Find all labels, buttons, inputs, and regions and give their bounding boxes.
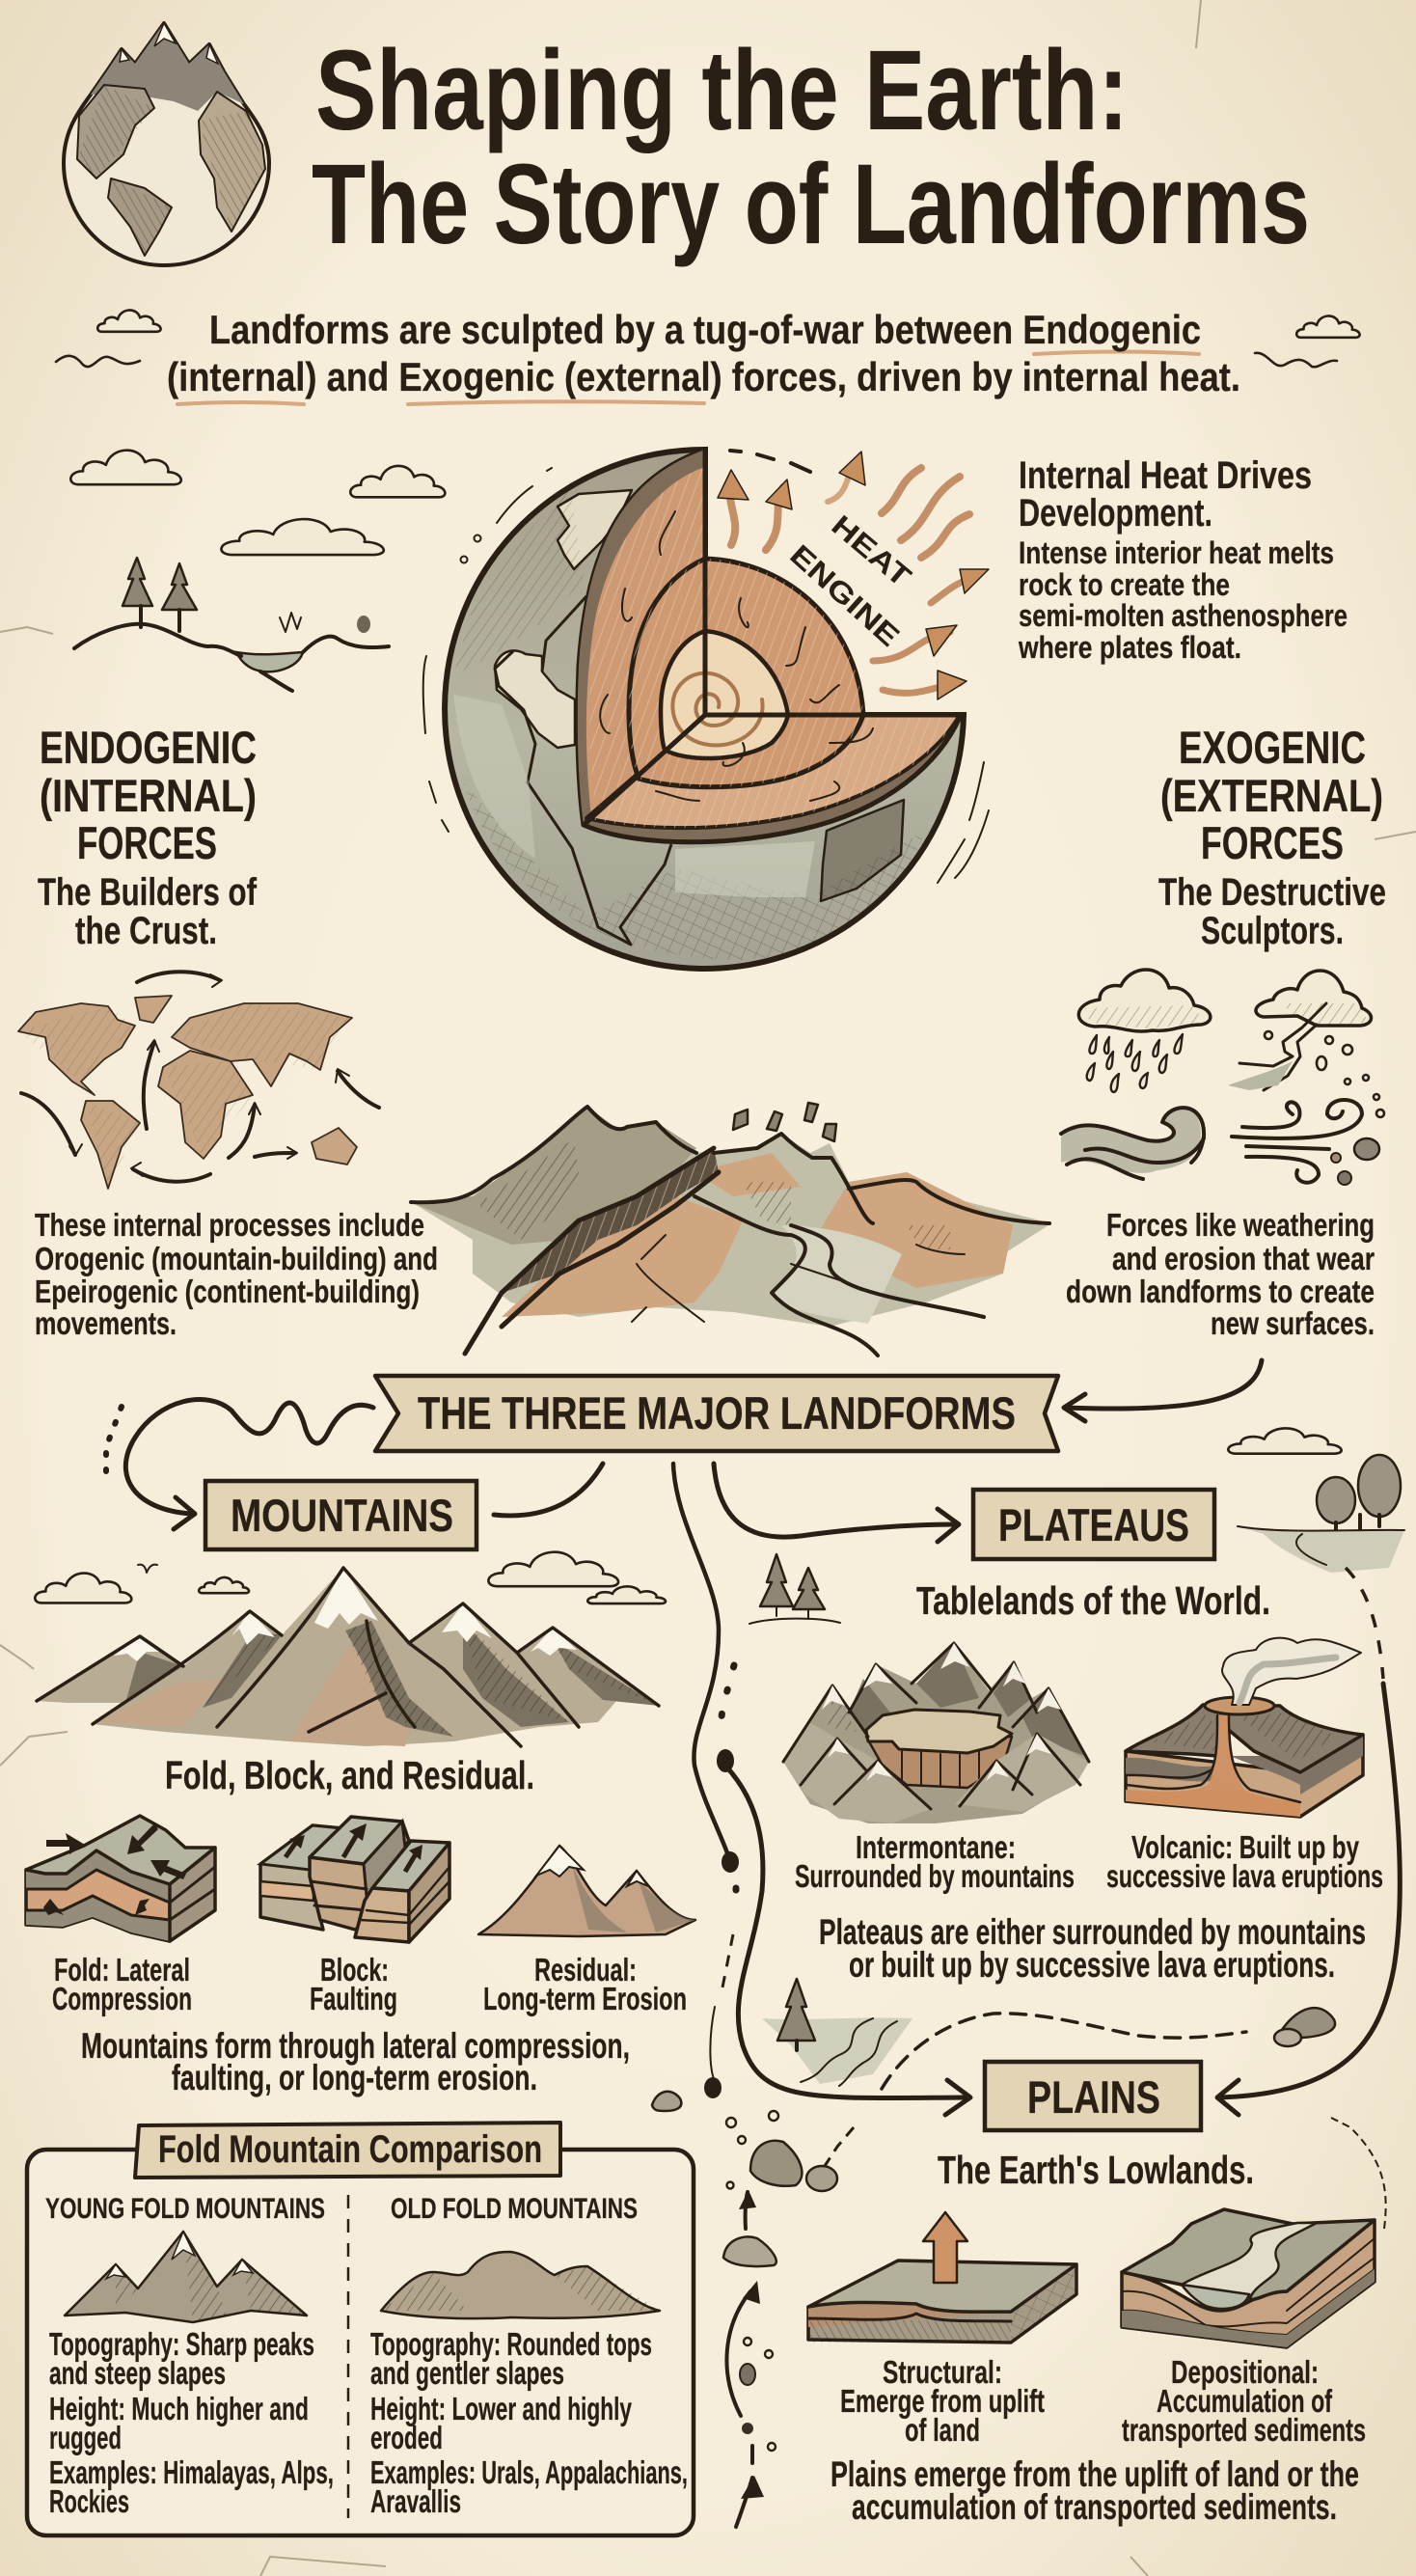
illustration: world map with plate arrows — [18, 972, 379, 1189]
arrow: banner to mountains — [106, 1400, 373, 1529]
text: internal heat — [1018, 454, 1348, 665]
wind swirls — [1232, 1100, 1362, 1183]
text: internal heat: where plates float. — [1018, 630, 1241, 665]
young column: Topography: Sharp peaks — [49, 2326, 314, 2362]
text: plain types: Depositional: — [1171, 2354, 1319, 2390]
plains heading: PLAINS — [1027, 2071, 1160, 2123]
banner: the three major landforms — [375, 1376, 1058, 1451]
young column: Rockies — [49, 2483, 129, 2519]
tornado cloud — [1256, 971, 1372, 1026]
young column: rugged — [49, 2420, 122, 2455]
icon: intro clouds and squiggles — [56, 310, 1360, 367]
young column — [45, 2193, 334, 2519]
text: endogenic processes — [35, 1207, 438, 1341]
column divider — [347, 2195, 349, 2518]
young column: Examples: Himalayas, Alps, — [49, 2454, 334, 2490]
text: mountain types: Long-term Erosion — [483, 1981, 687, 2016]
intro text: (internal) and Exogenic (external) forces, driven by internal heat. — [167, 354, 1240, 399]
text: endogenic processes: Orogenic (mountain-building) and — [35, 1241, 438, 1276]
text: mountain types: Faulting — [310, 1981, 397, 2016]
old column: OLD FOLD MOUNTAINS — [391, 2193, 638, 2225]
text: mountains summary: Fold, Block, and Residual. — [165, 1753, 534, 1797]
icon: boulders and upward arrows — [652, 2092, 854, 2527]
illustration: eroded faulted landscape — [410, 1103, 1051, 1356]
text: endogenic processes: movements. — [35, 1305, 177, 1341]
icon: trees and stream top right — [1238, 1455, 1404, 1573]
plateau cliffs — [866, 1737, 1012, 1788]
heat engine label: HEAT — [826, 509, 916, 593]
front peaks — [783, 1722, 1089, 1823]
plateaus heading: PLATEAUS — [998, 1499, 1189, 1550]
mountains heading: MOUNTAINS — [231, 1490, 453, 1541]
illustration: Earth cross-section — [423, 450, 989, 969]
arrow: short curve beside mountains — [494, 1464, 603, 1516]
wave — [1061, 1107, 1201, 1173]
plateaus heading — [973, 1490, 1214, 1559]
heading: endogenic: the Crust. — [75, 910, 217, 952]
plateau top — [866, 1710, 1012, 1753]
title — [312, 27, 1310, 268]
heading: endogenic: FORCES — [77, 817, 217, 868]
text: mountains form: faulting, or long-term erosion. — [172, 2058, 537, 2097]
text: plains summary — [831, 2454, 1359, 2527]
core — [661, 631, 788, 758]
text: mountains form — [81, 2026, 630, 2097]
icon: weather and erosion — [1061, 970, 1384, 1185]
text: exogenic forces — [1066, 1207, 1375, 1341]
intro text — [167, 307, 1240, 404]
illustration: intermontane plateau — [783, 1643, 1089, 1823]
comparison title ribbon: Fold Mountain Comparison — [158, 2128, 542, 2171]
heat engine label — [783, 509, 916, 653]
rain cloud — [1078, 970, 1211, 1031]
arrow: exogenic to banner — [1064, 1360, 1262, 1421]
mantle — [629, 559, 863, 787]
spiral — [672, 673, 763, 745]
heat engine label: ENGINE — [783, 539, 905, 653]
text: mountain types: Residual: — [534, 1952, 637, 1987]
text: plain types: Emerge from uplift — [840, 2383, 1045, 2419]
land masses — [453, 478, 926, 960]
young column: and steep slapes — [49, 2355, 226, 2391]
heading: exogenic: Sculptors. — [1201, 910, 1344, 952]
icon: clouds and hillside upper left — [70, 451, 445, 691]
text: plain types — [840, 2354, 1366, 2448]
old column: Topography: Rounded tops — [370, 2326, 652, 2362]
text: internal heat: Internal Heat Drives — [1019, 454, 1312, 497]
icon: residual peaks — [478, 1846, 695, 1936]
heat arrows — [718, 451, 989, 699]
crust — [578, 450, 705, 825]
illustration: mountain range — [37, 1568, 659, 1746]
heading: endogenic — [38, 722, 258, 952]
text: plain types: Structural: — [883, 2354, 1002, 2390]
text: plateau types: Intermontane: — [856, 1829, 1016, 1865]
old column: and gentler slapes — [370, 2355, 564, 2391]
text: plateau types: Surrounded by mountains — [795, 1858, 1075, 1894]
heading: exogenic: FORCES — [1201, 817, 1344, 868]
arrow: banner to plateaus — [714, 1464, 959, 1542]
old column: Height: Lower and highly — [370, 2391, 632, 2426]
text: plain types: of land — [905, 2412, 980, 2448]
title: Shaping the Earth: — [315, 27, 1129, 154]
heading: endogenic: The Builders of — [38, 871, 258, 914]
icon: clouds by mountains — [35, 1428, 1342, 1603]
text: endogenic processes: These internal processes include — [35, 1207, 424, 1243]
icon: trees near plateaus — [749, 1554, 840, 1624]
old column — [370, 2193, 688, 2519]
heading: endogenic: ENDOGENIC — [40, 722, 257, 773]
young column: Height: Much higher and — [49, 2391, 309, 2426]
plateaus subtitle: Tablelands of the World. — [916, 1578, 1270, 1623]
illustration: depositional plain block — [1122, 2209, 1375, 2347]
illustration: structural plain block — [808, 2212, 1076, 2343]
heading: endogenic: (INTERNAL) — [40, 770, 257, 821]
text: mountains form: Mountains form through lateral compression, — [81, 2026, 630, 2066]
text: internal heat: rock to create the — [1019, 567, 1230, 602]
brushed ground — [410, 1107, 1051, 1327]
mountains heading — [205, 1481, 477, 1549]
icon: fold block — [26, 1816, 215, 1941]
motion marks — [423, 468, 989, 883]
icon: block fault — [260, 1817, 449, 1942]
text: mountain types: Compression — [52, 1981, 192, 2016]
comparison title ribbon — [135, 2123, 560, 2178]
banner: the three major landforms: THE THREE MAJOR LANDFORMS — [418, 1387, 1016, 1439]
text: plateaus summary — [819, 1912, 1366, 1985]
illustration: volcano block — [1126, 1638, 1363, 1817]
icon: globe with mountain top — [64, 23, 269, 265]
plains subtitle: The Earth's Lowlands. — [938, 2148, 1254, 2192]
heading: exogenic — [1158, 722, 1386, 952]
text: mountain types — [52, 1952, 687, 2016]
text: exogenic forces: new surfaces. — [1211, 1305, 1375, 1341]
young column: YOUNG FOLD MOUNTAINS — [45, 2193, 325, 2225]
icon: tree, stream and dashed trail — [762, 1979, 1335, 2089]
text: mountain types: Fold: Lateral — [54, 1952, 190, 1987]
shadowed base — [783, 1643, 1089, 1823]
text: plateau types — [795, 1829, 1383, 1894]
text: endogenic processes: Epeirogenic (continent-building) — [35, 1274, 420, 1309]
text: mountain types: Block: — [320, 1952, 389, 1987]
arrows: flow lines to plains — [673, 1464, 1400, 2115]
old column: Aravallis — [370, 2483, 461, 2519]
old column: Examples: Urals, Appalachians, — [370, 2454, 688, 2490]
panel: fold mountain comparison — [27, 2123, 694, 2535]
text: internal heat: Intense interior heat melts — [1019, 535, 1334, 570]
text: internal heat: Development. — [1019, 492, 1212, 534]
plains heading — [985, 2062, 1201, 2130]
old column: eroded — [370, 2420, 443, 2455]
intro text: Landforms are sculpted by a tug-of-war between Endogenic — [209, 307, 1201, 352]
text: plain types: Accumulation of — [1157, 2383, 1333, 2419]
dashed marks right of plains — [1331, 2118, 1386, 2229]
section lines — [584, 450, 960, 825]
heading: exogenic: EXOGENIC — [1179, 722, 1366, 773]
